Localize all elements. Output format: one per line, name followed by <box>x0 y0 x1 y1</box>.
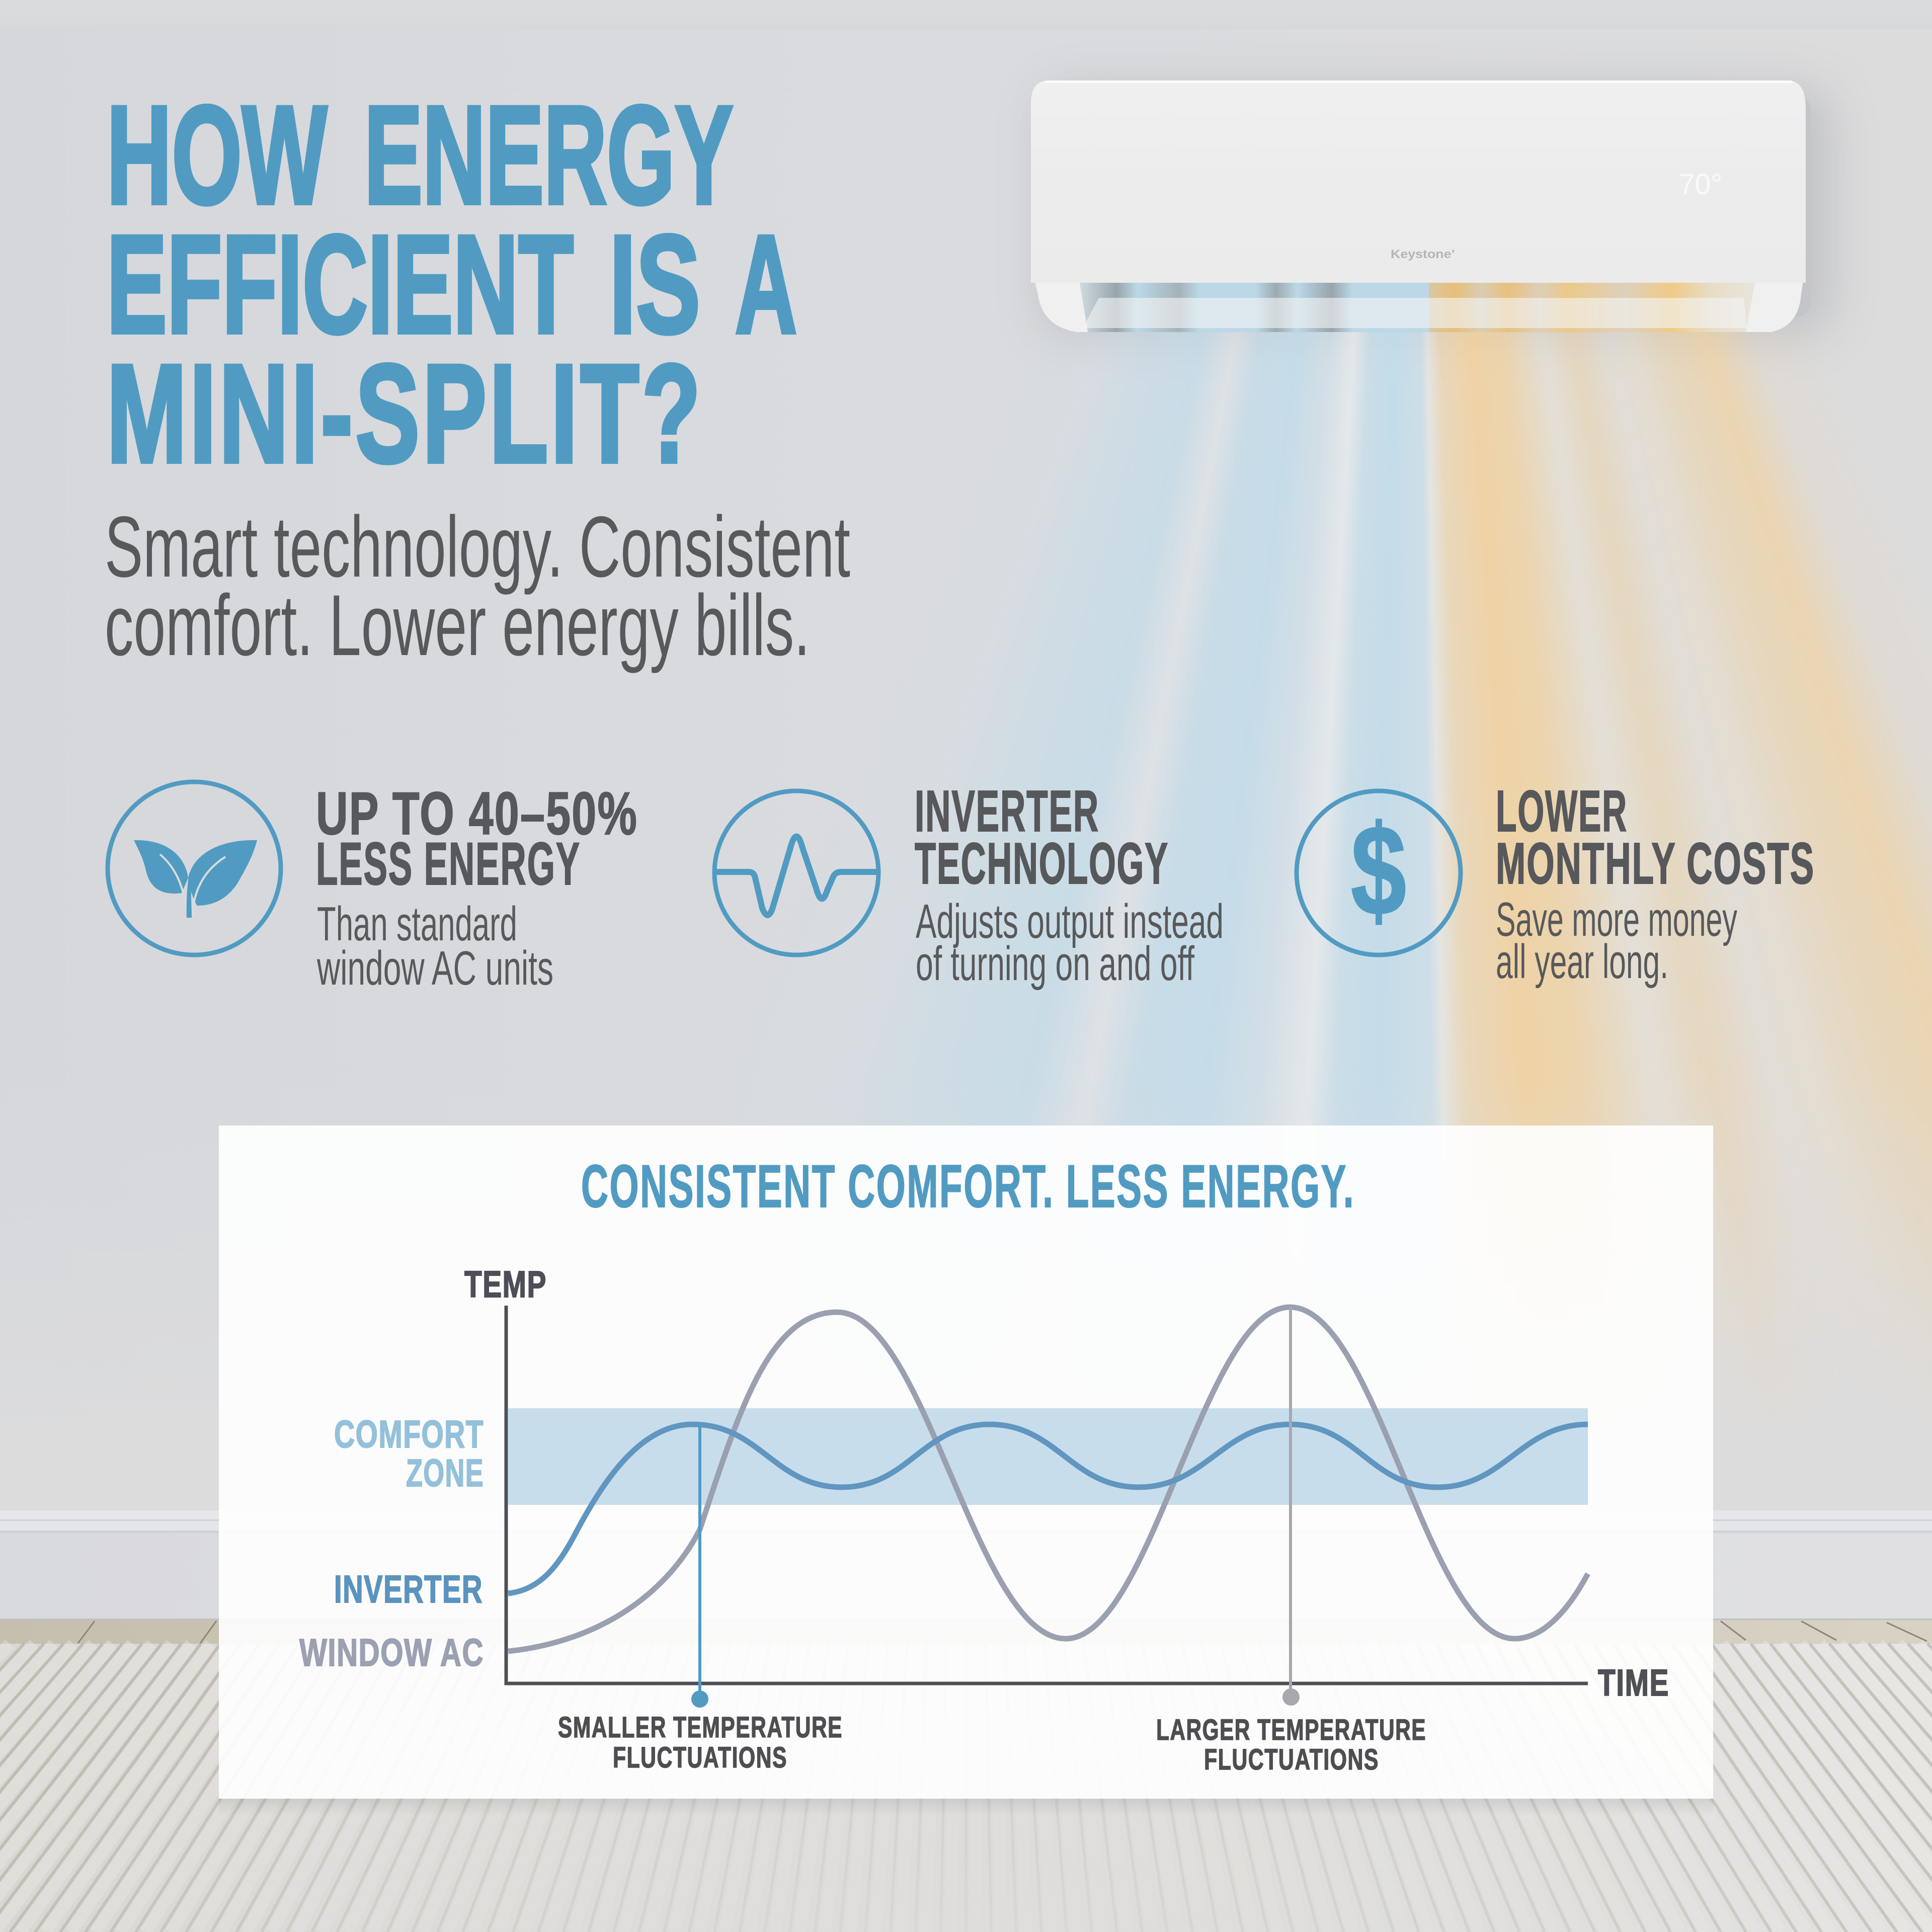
comfort zone label: ZONE <box>406 1452 484 1495</box>
callout: larger temperature fluctuations: LARGER TEMPERATURE <box>1156 1714 1426 1746</box>
louver <box>1083 298 1747 328</box>
temperature display: 70° <box>1679 168 1722 201</box>
ceiling band <box>0 0 1932 29</box>
callout: larger temperature fluctuations: FLUCTUATIONS <box>1204 1743 1379 1776</box>
panel background <box>219 1125 1713 1799</box>
heading: INVERTER <box>915 778 1099 844</box>
heading <box>1496 778 1815 896</box>
comfort zone label: COMFORT <box>334 1413 484 1456</box>
body text: all year long. <box>1496 935 1668 989</box>
body text: Save more money <box>1496 893 1737 946</box>
heading <box>316 780 638 898</box>
body text: window AC units <box>316 941 553 995</box>
vent recess warm side <box>1429 283 1755 332</box>
window AC label: WINDOW AC <box>299 1631 484 1674</box>
comfort zone label <box>334 1413 484 1495</box>
stat: monthly costs <box>1297 778 1815 989</box>
axes <box>506 1306 1588 1683</box>
rug <box>0 1644 1932 1932</box>
lower housing <box>1034 280 1803 332</box>
callout: larger temperature fluctuations <box>1156 1714 1426 1776</box>
subtitle: comfort. Lower energy bills. <box>105 577 810 674</box>
icon: dollar: $ <box>1351 799 1406 942</box>
body text <box>316 897 553 995</box>
heading: TECHNOLOGY <box>915 831 1169 896</box>
airflow: cool and warm air streams <box>0 332 1932 1540</box>
stat: energy savings <box>108 780 638 995</box>
marker: smaller fluctuations <box>691 1424 708 1708</box>
window AC curve <box>508 1307 1588 1651</box>
title: MINI-SPLIT? <box>107 335 703 492</box>
inverter curve <box>508 1424 1588 1593</box>
heading: LESS ENERGY <box>316 830 581 898</box>
brand label: Keystone’ <box>1391 248 1455 261</box>
airflow fade near floor <box>0 1082 1932 1545</box>
stat: inverter technology <box>714 778 1224 991</box>
axis label: temp: TEMP <box>464 1263 547 1305</box>
title: HOW <box>107 76 328 233</box>
inverter label: INVERTER <box>334 1568 483 1611</box>
panel: comfort chart <box>219 1125 1713 1799</box>
top highlight <box>1044 80 1794 83</box>
icon: dollar <box>1297 791 1461 955</box>
panel shadow <box>219 1799 1713 1816</box>
vent recess cool side <box>1080 283 1429 332</box>
callout: smaller temperature fluctuations: SMALLER TEMPERATURE <box>558 1711 843 1744</box>
chart title: CONSISTENT COMFORT. LESS ENERGY. <box>581 1153 1355 1220</box>
title <box>107 76 797 492</box>
title: IS <box>609 206 700 362</box>
unit front body <box>1031 80 1806 283</box>
comfort zone band <box>508 1408 1588 1505</box>
subtitle <box>105 499 850 674</box>
heading: LOWER <box>1496 778 1628 844</box>
body text: Adjusts output instead <box>916 895 1224 948</box>
unit shadow on wall <box>1046 96 1811 317</box>
callout: smaller temperature fluctuations: FLUCTUATIONS <box>613 1741 787 1774</box>
baseboard <box>0 1510 1932 1620</box>
subtitle: Smart technology. Consistent <box>105 499 850 595</box>
icon: pulse <box>714 791 878 955</box>
icon: leaf <box>108 782 281 955</box>
body text: of turning on and off <box>916 937 1194 991</box>
title: EFFICIENT <box>107 206 574 362</box>
title: ENERGY <box>364 76 733 233</box>
heading <box>915 778 1169 896</box>
air conditioner unit <box>1031 80 1806 332</box>
body text <box>916 895 1224 991</box>
title: A <box>735 206 797 362</box>
axis label: time: TIME <box>1598 1662 1669 1704</box>
marker: larger fluctuations <box>1282 1307 1300 1706</box>
heading: UP TO 40–50% <box>316 780 638 847</box>
body text <box>1496 893 1737 989</box>
wood floor strip <box>0 1620 1932 1644</box>
body text: Than standard <box>317 897 517 951</box>
callout: smaller temperature fluctuations <box>558 1711 843 1774</box>
